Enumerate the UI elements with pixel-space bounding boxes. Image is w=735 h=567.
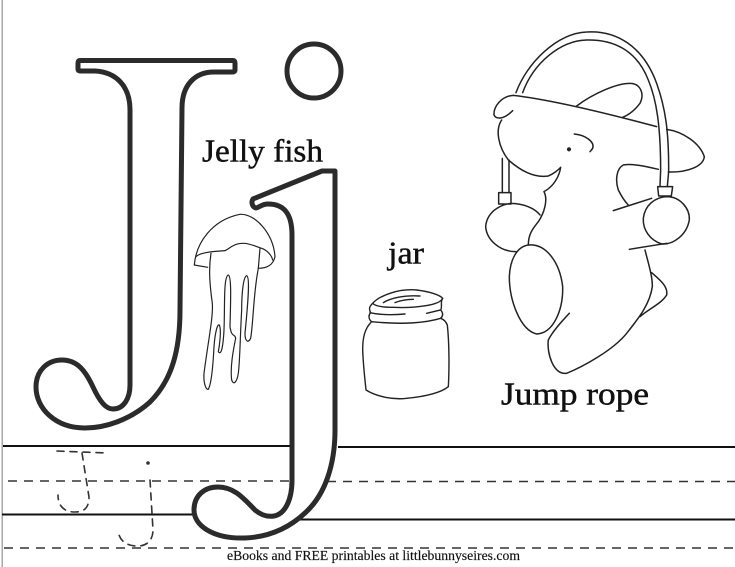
jump rope <box>502 32 669 193</box>
label: Jump rope: Jump rope <box>501 376 649 412</box>
bunny ear <box>577 83 642 117</box>
label: jar: jar <box>387 234 424 270</box>
left mitt and handle <box>486 193 540 252</box>
footer credit: eBooks and FREE printables at littlebunnyseires.com <box>227 548 521 563</box>
icon: jellyfish <box>194 214 275 389</box>
lowercase outline letter j <box>194 171 335 538</box>
circle dot of lowercase j <box>287 44 341 98</box>
bunny back ear and arm <box>613 129 704 249</box>
label: Jelly fish: Jelly fish <box>202 132 323 168</box>
icon: jar <box>363 290 449 399</box>
bunny head and torso <box>494 95 657 245</box>
bunny leg <box>509 245 563 334</box>
bunny face <box>574 134 593 152</box>
dashed tracing letter j <box>118 462 153 546</box>
right mitt and handle <box>643 187 689 244</box>
uppercase outline letter J <box>36 60 235 428</box>
dashed tracing letter J <box>57 451 107 512</box>
icon: bunny with jump rope <box>486 32 704 373</box>
writing lines <box>2 446 735 548</box>
bunny body <box>548 250 667 373</box>
